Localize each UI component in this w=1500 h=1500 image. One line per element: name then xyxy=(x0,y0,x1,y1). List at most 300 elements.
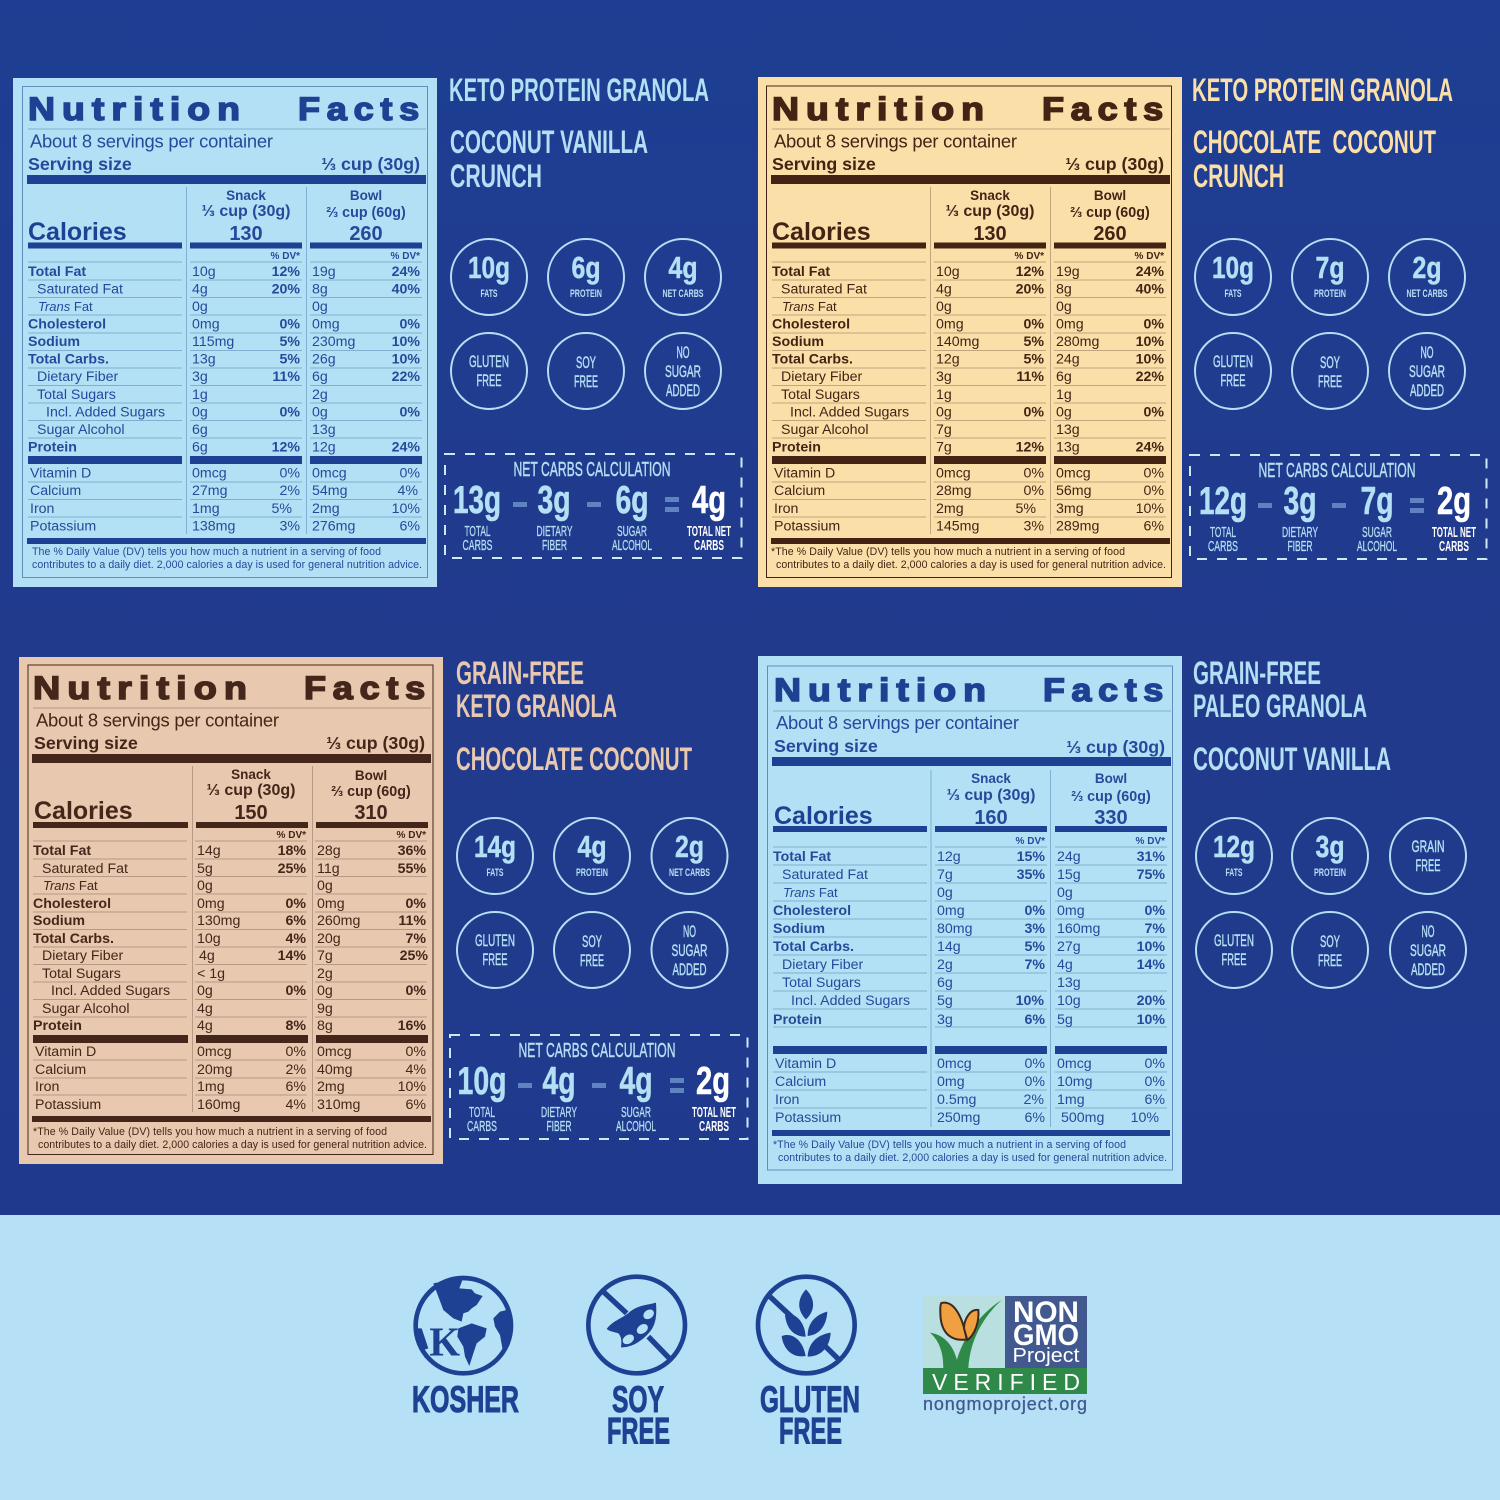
net carbs calculation: coconut vanilla crunch: CARBS xyxy=(462,538,492,554)
nutrient rows: 0mcg xyxy=(1057,1056,1092,1072)
text: servings per container: About 8 servings per container xyxy=(36,710,279,730)
product name: grain-free keto granola chocolate coconut: GRAIN-FREE xyxy=(456,655,584,691)
footnote xyxy=(33,1126,427,1151)
icon: grass blades and butterfly xyxy=(930,1300,1002,1368)
nutrient rows: 5% xyxy=(1015,501,1036,517)
product name: keto protein granola chocolate coconut crunch: CRUNCH xyxy=(1193,158,1284,194)
badges: paleo coconut vanilla: SOY xyxy=(1320,933,1340,951)
thick rules xyxy=(772,757,1171,1136)
nutrient rows: 20mg xyxy=(197,1062,232,1078)
nutrient rows: 5% xyxy=(271,501,292,517)
heading: Nutrition Facts: Nutrition xyxy=(33,670,254,706)
nutrient rows: Total Sugars xyxy=(42,966,121,982)
nutrient rows: 0% xyxy=(405,983,426,999)
text: serving size: Serving size xyxy=(34,733,138,753)
nutrient rows: 1mg xyxy=(1057,1092,1085,1108)
calories header: % DV* xyxy=(397,830,426,841)
text: serving size xyxy=(34,733,425,753)
nutrient rows: 11% xyxy=(272,369,300,385)
nutrient rows: 10g xyxy=(192,264,216,280)
nutrient rows: 289mg xyxy=(1056,518,1099,534)
logo: Non GMO Project Verified: GMO xyxy=(1013,1319,1079,1352)
badges: grain-free keto chocolate coconut xyxy=(457,818,728,988)
text: serving size: ⅓ cup (30g) xyxy=(1066,737,1165,757)
nutrient rows: 1mg xyxy=(197,1079,225,1095)
nutrient rows: 16% xyxy=(398,1018,426,1034)
badges: chocolate coconut crunch: NO xyxy=(1420,344,1434,362)
badges: coconut vanilla crunch: FREE xyxy=(476,372,502,390)
badges: coconut vanilla crunch xyxy=(451,239,721,409)
text: serving size: Serving size xyxy=(772,154,876,174)
nutrient rows: 10% xyxy=(392,501,420,517)
nutrient rows: 10g xyxy=(1057,993,1081,1009)
net carbs calculation: grain-free keto chocolate coconut: TOTAL NET xyxy=(692,1105,736,1121)
certification: kosher xyxy=(412,1277,519,1420)
badges: chocolate coconut crunch: FATS xyxy=(1224,288,1242,300)
calories header: Calories xyxy=(772,218,871,246)
nutrient rows: Total Fat xyxy=(772,264,830,280)
nutrient rows: 1mg xyxy=(192,501,220,517)
nutrient rows: 6g xyxy=(192,422,208,438)
net carbs calculation: coconut vanilla crunch: NET CARBS CALCULATION xyxy=(514,459,670,481)
heading: Nutrition Facts: Nutrition xyxy=(772,91,991,127)
nutrient rows: Total Fat xyxy=(28,264,86,280)
net carbs calculation: coconut vanilla crunch: ALCOHOL xyxy=(612,538,652,554)
nutrient rows: 6% xyxy=(1143,518,1164,534)
nutrient rows: 0mcg xyxy=(192,466,227,482)
nutrient rows: Total Fat xyxy=(773,849,831,865)
badges: coconut vanilla crunch: NO xyxy=(676,344,690,362)
nutrient rows: 0% xyxy=(399,404,420,420)
nutrient rows: Iron xyxy=(774,501,798,517)
nutrient rows: 10% xyxy=(1137,1012,1165,1028)
nutrient rows: 0mcg xyxy=(937,1056,972,1072)
nutrient rows: 2g xyxy=(937,957,953,973)
net carbs calculation: grain-free keto chocolate coconut: NET CARBS CALCULATION xyxy=(518,1040,676,1062)
nutrient rows: 0g xyxy=(1056,404,1072,420)
certification: gluten free xyxy=(758,1277,860,1452)
nutrient rows: 36% xyxy=(398,843,426,859)
nutrient rows xyxy=(28,264,420,534)
net carbs calculation: chocolate coconut crunch: ALCOHOL xyxy=(1357,539,1397,555)
nutrient rows: Dietary Fiber xyxy=(42,948,123,964)
net carbs calculation: coconut vanilla crunch xyxy=(445,454,742,558)
nutrient rows: Dietary Fiber xyxy=(37,369,118,385)
nutrient rows: 0% xyxy=(285,896,306,912)
heading: Nutrition Facts xyxy=(33,670,432,706)
nutrient rows: 56mg xyxy=(1056,483,1092,499)
nutrient rows: 1g xyxy=(1056,387,1072,403)
nutrient rows: 7g xyxy=(936,440,952,456)
net carbs calculation: chocolate coconut crunch: 7g xyxy=(1360,480,1394,523)
calories header: % DV* xyxy=(277,830,306,841)
label: gluten free: GLUTEN xyxy=(760,1379,860,1420)
nutrient rows: 160mg xyxy=(1057,921,1100,937)
nutrient rows: 7g xyxy=(937,867,953,883)
calories header: Bowl xyxy=(355,768,387,783)
nutrient rows: 4% xyxy=(285,1097,306,1113)
calories header: % DV* xyxy=(1135,251,1164,262)
product name: keto protein granola coconut vanilla crunch: CRUNCH xyxy=(450,158,542,194)
net carbs calculation: chocolate coconut crunch: TOTAL xyxy=(1210,525,1236,541)
footnote: contributes to a daily diet. 2,000 calories a day is used for general nutrition advice. xyxy=(776,559,1166,571)
nutrient rows: 7% xyxy=(1024,957,1045,973)
badges: coconut vanilla crunch: FREE xyxy=(574,373,598,391)
nutrient rows: 19g xyxy=(312,264,336,280)
nutrient rows: 0mg xyxy=(936,316,964,332)
calories header: 130 xyxy=(229,223,263,245)
nutrient rows: Sugar Alcohol xyxy=(42,1001,130,1017)
nutrient rows: 12g xyxy=(936,352,960,368)
badges: coconut vanilla crunch: ADDED xyxy=(666,382,700,400)
badges: grain-free keto chocolate coconut: NO xyxy=(683,923,696,941)
nutrient rows: Potassium xyxy=(30,518,96,534)
nutrient rows: 0mg xyxy=(937,1074,965,1090)
badges: paleo coconut vanilla: 3g xyxy=(1316,829,1344,864)
nutrient rows: 5% xyxy=(1023,334,1044,350)
text: serving size xyxy=(772,154,1164,174)
badges: paleo coconut vanilla: ADDED xyxy=(1411,961,1445,979)
nutrient rows: 0mg xyxy=(317,896,345,912)
nutrient rows: 2% xyxy=(285,1062,306,1078)
nutrient rows: 10mg xyxy=(1057,1074,1092,1090)
nutrient rows: 5g xyxy=(197,861,213,877)
badges: chocolate coconut crunch: SUGAR xyxy=(1409,363,1445,381)
panel: nutrition label, chocolate coconut keto xyxy=(19,657,443,1164)
icon: kosher globe xyxy=(416,1277,512,1373)
nutrient rows: 0mcg xyxy=(936,466,971,482)
nutrient rows: 0% xyxy=(1143,483,1164,499)
nutrient rows: 2mg xyxy=(317,1079,345,1095)
net carbs calculation: chocolate coconut crunch: DIETARY xyxy=(1282,525,1318,541)
footnote xyxy=(771,546,1166,571)
net carbs calculation: grain-free keto chocolate coconut: ALCOHOL xyxy=(616,1119,656,1135)
nutrient rows: 0mcg xyxy=(317,1044,352,1060)
nutrient rows: 24% xyxy=(392,264,420,280)
logo: Non GMO Project Verified: NON xyxy=(1013,1296,1079,1329)
badges: chocolate coconut crunch: 10g xyxy=(1212,250,1254,285)
nutrient rows: 11g xyxy=(317,861,340,877)
nutrient rows: Incl. Added Sugars xyxy=(791,993,910,1009)
nutrient rows: 6g xyxy=(192,440,208,456)
net carbs calculation: grain-free keto chocolate coconut: DIETARY xyxy=(541,1105,577,1121)
nutrient rows: 8g xyxy=(317,1018,333,1034)
net carbs calculation: grain-free keto chocolate coconut: FIBER xyxy=(546,1119,572,1135)
nutrient rows: 10% xyxy=(1136,334,1164,350)
nutrient rows: 55% xyxy=(398,861,426,877)
product name: grain-free paleo granola coconut vanilla: PALEO GRANOLA xyxy=(1193,688,1367,724)
footnote xyxy=(773,1139,1167,1164)
badges: chocolate coconut crunch: FREE xyxy=(1220,372,1246,390)
badges: paleo coconut vanilla: 12g xyxy=(1213,829,1255,864)
badges: chocolate coconut crunch: ADDED xyxy=(1410,382,1444,400)
background: light blue footer band xyxy=(0,1215,1500,1500)
nutrient rows: Total Sugars xyxy=(782,975,861,991)
nutrient rows: 12% xyxy=(1016,440,1044,456)
footnote: *The % Daily Value (DV) tells you how much a nutrient in a serving of food xyxy=(771,546,1125,558)
badges: grain-free keto chocolate coconut: ADDED xyxy=(672,961,707,979)
nutrient rows: 115mg xyxy=(192,334,234,350)
certification: soy free xyxy=(588,1277,685,1452)
badges: grain-free keto chocolate coconut: 4g xyxy=(578,829,606,864)
calories header: 310 xyxy=(354,802,388,824)
calories header: Calories xyxy=(34,797,133,825)
nutrient rows: Saturated Fat xyxy=(42,861,128,877)
heading: Nutrition Facts: Facts xyxy=(298,91,426,127)
nutrient rows: Incl. Added Sugars xyxy=(46,404,165,420)
nutrient rows: 4g xyxy=(1057,957,1073,973)
nutrient rows: 12% xyxy=(1016,264,1044,280)
net carbs calculation: coconut vanilla crunch: 6g xyxy=(616,479,648,522)
nutrient rows: 0g xyxy=(937,885,953,901)
nutrient rows: 14% xyxy=(278,948,306,964)
nutrient rows: Iron xyxy=(35,1079,59,1095)
nutrient rows: 24g xyxy=(1057,849,1081,865)
net carbs calculation: coconut vanilla crunch: 3g xyxy=(538,479,570,522)
nutrient rows: 130mg xyxy=(197,913,240,929)
badges: paleo coconut vanilla: FREE xyxy=(1222,951,1246,969)
footnote: contributes to a daily diet. 2,000 calories a day is used for general nutrition advice. xyxy=(32,559,422,571)
calories header: % DV* xyxy=(391,251,420,262)
nutrient rows: 0% xyxy=(405,1044,426,1060)
nutrient rows: 4g xyxy=(192,282,208,298)
calories header: Calories xyxy=(774,802,873,830)
nutrient rows: 14g xyxy=(937,939,961,955)
nutrient rows: Vitamin D xyxy=(30,466,91,482)
nutrient rows: Protein xyxy=(773,1012,822,1028)
product name: keto protein granola coconut vanilla crunch: COCONUT VANILLA xyxy=(450,124,648,160)
badges: coconut vanilla crunch: NET CARBS xyxy=(662,288,704,300)
nutrient rows: 0% xyxy=(1144,903,1165,919)
nutrient rows: 10% xyxy=(398,1079,426,1095)
nutrient rows xyxy=(772,264,1164,534)
nutrient rows: 14% xyxy=(1137,957,1165,973)
net carbs calculation: chocolate coconut crunch: 2g xyxy=(1437,480,1471,523)
label: gluten free xyxy=(760,1379,860,1452)
heading: Nutrition Facts xyxy=(774,672,1170,708)
nutrient rows: 7g xyxy=(317,948,333,964)
nutrient rows: 10% xyxy=(1136,501,1164,517)
footnote: contributes to a daily diet. 2,000 calories a day is used for general nutrition advice. xyxy=(38,1139,427,1151)
net carbs calculation: chocolate coconut crunch: FIBER xyxy=(1288,539,1312,555)
nutrient rows: Potassium xyxy=(774,518,840,534)
badges: coconut vanilla crunch: PROTEIN xyxy=(570,288,602,300)
nutrient rows: 4g xyxy=(197,1001,213,1017)
nutrient rows: 40% xyxy=(392,282,420,298)
nutrient rows: Trans Fat xyxy=(43,878,98,893)
nutrient rows: 10g xyxy=(197,931,221,947)
nutrient rows: Sugar Alcohol xyxy=(781,422,869,438)
nutrient rows: 5g xyxy=(1057,1012,1073,1028)
nutrient rows: 10% xyxy=(1136,352,1164,368)
nutrient rows: 3g xyxy=(936,369,952,385)
badges: coconut vanilla crunch: SUGAR xyxy=(665,363,701,381)
nutrient rows: Sodium xyxy=(33,913,85,929)
nutrient rows: 0% xyxy=(285,1044,306,1060)
nutrient rows: Protein xyxy=(772,440,821,456)
nutrient rows: 140mg xyxy=(936,334,979,350)
badges: grain-free keto chocolate coconut: 2g xyxy=(675,829,704,864)
heading: Nutrition Facts xyxy=(28,91,426,127)
nutrient rows: Saturated Fat xyxy=(37,282,123,298)
nutrient rows: 8% xyxy=(285,1018,306,1034)
nutrient rows: 6% xyxy=(285,913,306,929)
nutrient rows: 0mcg xyxy=(197,1044,232,1060)
nutrient rows: 8g xyxy=(1056,282,1072,298)
nutrient rows: Vitamin D xyxy=(775,1056,836,1072)
nutrient rows: 2g xyxy=(312,387,328,403)
nutrient rows: 6g xyxy=(312,369,328,385)
footnote: The % Daily Value (DV) tells you how much a nutrient in a serving of food xyxy=(32,546,381,558)
nutrient rows: 4% xyxy=(405,1062,426,1078)
nutrient rows: 0% xyxy=(279,316,300,332)
logo: Non GMO Project Verified: Project xyxy=(1012,1345,1080,1367)
nutrient rows: 0g xyxy=(317,983,333,999)
nutrient rows: 20% xyxy=(272,282,300,298)
badges: paleo coconut vanilla: SUGAR xyxy=(1410,942,1446,960)
label: soy free: SOY xyxy=(612,1379,664,1420)
heading: Nutrition Facts: Facts xyxy=(1042,91,1170,127)
nutrient rows: 12g xyxy=(937,849,961,865)
calories header: % DV* xyxy=(1015,251,1044,262)
nutrient rows: Trans Fat xyxy=(38,299,93,314)
nutrient rows: 6% xyxy=(285,1079,306,1095)
nutrient rows: 0% xyxy=(1144,1056,1165,1072)
nutrient rows: 7% xyxy=(405,931,426,947)
calories header: ⅔ cup (60g) xyxy=(1071,789,1151,805)
logo: Non GMO Project Verified: VERIFIED xyxy=(932,1369,1080,1395)
nutrient rows: 13g xyxy=(1057,975,1081,991)
footnote: contributes to a daily diet. 2,000 calories a day is used for general nutrition advice. xyxy=(778,1152,1167,1164)
nutrient rows: Sodium xyxy=(28,334,80,350)
badges: paleo coconut vanilla xyxy=(1196,818,1466,988)
nutrient rows: 0g xyxy=(312,299,328,315)
nutrient rows: 25% xyxy=(278,861,306,877)
nutrient rows: Total Sugars xyxy=(37,387,116,403)
nutrient rows: 280mg xyxy=(1056,334,1099,350)
nutrient rows: 12% xyxy=(272,264,300,280)
nutrient rows: 28mg xyxy=(936,483,972,499)
calories header xyxy=(772,188,1164,262)
nutrient rows: 0g xyxy=(317,878,333,894)
product name: grain-free paleo granola coconut vanilla xyxy=(1193,655,1391,777)
label: soy free: FREE xyxy=(607,1410,670,1452)
nutrient rows: Incl. Added Sugars xyxy=(51,983,170,999)
nutrient rows: 13g xyxy=(192,352,216,368)
product name: keto protein granola coconut vanilla crunch: KETO PROTEIN GRANOLA xyxy=(449,72,709,108)
nutrient rows: 0mg xyxy=(312,316,340,332)
badges: coconut vanilla crunch: SOY xyxy=(576,354,596,372)
net carbs calculation: coconut vanilla crunch: 4g xyxy=(692,479,726,522)
net carbs calculation: coconut vanilla crunch: TOTAL NET xyxy=(687,524,731,540)
net carbs calculation: grain-free keto chocolate coconut: 10g xyxy=(458,1060,506,1103)
nutrient rows: 0% xyxy=(1023,466,1044,482)
nutrient rows: 3g xyxy=(192,369,208,385)
nutrient rows: 20g xyxy=(317,931,341,947)
nutrient rows: 25% xyxy=(400,948,428,964)
nutrient rows: 2mg xyxy=(936,501,964,517)
calories header: 260 xyxy=(1093,223,1127,245)
nutrient rows: 40mg xyxy=(317,1062,352,1078)
calories header: 150 xyxy=(234,802,268,824)
text: servings per container: About 8 servings per container xyxy=(776,712,1019,733)
nutrient rows: 6% xyxy=(1024,1012,1045,1028)
icon: crossed-out wheat xyxy=(758,1277,855,1373)
nutrient rows: 0g xyxy=(192,404,208,420)
nutrient rows: 31% xyxy=(1137,849,1165,865)
calories header: Bowl xyxy=(1095,771,1127,786)
nutrient rows: 6% xyxy=(405,1097,426,1113)
nutrient rows: 4g xyxy=(197,1018,213,1034)
nutrient rows: Trans Fat xyxy=(783,885,838,900)
net carbs calculation: grain-free keto chocolate coconut: SUGAR xyxy=(621,1105,651,1121)
heading: Nutrition Facts: Nutrition xyxy=(28,91,247,127)
calories header: ⅓ cup (30g) xyxy=(946,203,1034,220)
nutrient rows: 27g xyxy=(1057,939,1081,955)
nutrient rows: 10% xyxy=(392,352,420,368)
nutrient rows: 13g xyxy=(1056,422,1080,438)
nutrient rows: 14g xyxy=(197,843,221,859)
nutrient rows: 0.5mg xyxy=(937,1092,976,1108)
nutrient rows: 1g xyxy=(936,387,952,403)
icon: crossed-out soybean pod xyxy=(588,1277,685,1373)
text: serving size: Serving size xyxy=(774,736,878,756)
net carbs calculation: grain-free keto chocolate coconut: 4g xyxy=(542,1060,576,1103)
nutrient rows: Protein xyxy=(33,1018,82,1034)
product name: keto protein granola coconut vanilla crunch xyxy=(449,72,709,194)
nutrient rows: Calcium xyxy=(774,483,825,499)
nutrient rows: Total Carbs. xyxy=(772,352,853,368)
badges: coconut vanilla crunch: 6g xyxy=(572,250,600,285)
logo: Non GMO Project Verified: nongmoproject.org xyxy=(923,1394,1087,1414)
nutrient rows: 500mg xyxy=(1061,1110,1104,1126)
nutrient rows: 0% xyxy=(1143,404,1164,420)
nutrient rows: 6% xyxy=(399,518,420,534)
nutrient rows: 0% xyxy=(399,466,420,482)
nutrient rows: 230mg xyxy=(312,334,355,350)
label: kosher: KOSHER xyxy=(412,1379,519,1420)
nutrient rows: Protein xyxy=(28,440,77,456)
nutrient rows: 0mcg xyxy=(1056,466,1091,482)
nutrient rows: 0mg xyxy=(1056,316,1084,332)
nutrient rows: 10g xyxy=(936,264,960,280)
net carbs calculation: chocolate coconut crunch: 12g xyxy=(1199,480,1247,523)
calories header: 260 xyxy=(349,223,383,245)
nutrient rows: Sodium xyxy=(772,334,824,350)
product name: grain-free keto granola chocolate coconut: KETO GRANOLA xyxy=(456,688,617,724)
net carbs calculation: coconut vanilla crunch: SUGAR xyxy=(617,524,647,540)
badges: grain-free keto chocolate coconut: NET CARBS xyxy=(669,867,710,879)
badges: coconut vanilla crunch: 4g xyxy=(668,250,698,285)
nutrient rows: 0% xyxy=(1144,1074,1165,1090)
nutrient rows: Potassium xyxy=(35,1097,101,1113)
badges: grain-free keto chocolate coconut: PROTEIN xyxy=(576,867,608,879)
text: serving size xyxy=(28,154,420,174)
nutrient rows: 4g xyxy=(199,948,215,964)
nutrient rows: 145mg xyxy=(936,518,979,534)
panel: nutrition label, coconut vanilla crunch xyxy=(13,78,437,587)
nutrient rows: 3% xyxy=(1023,518,1044,534)
net carbs calculation: grain-free keto chocolate coconut: CARBS xyxy=(699,1119,729,1135)
badges: chocolate coconut crunch: PROTEIN xyxy=(1314,288,1346,300)
text: servings per container: About 8 servings per container xyxy=(30,130,273,152)
badges: paleo coconut vanilla: NO xyxy=(1422,923,1435,941)
product name: grain-free paleo granola coconut vanilla: GRAIN-FREE xyxy=(1193,655,1321,691)
calories header: % DV* xyxy=(271,251,300,262)
badges: chocolate coconut crunch: SOY xyxy=(1320,354,1340,372)
badges: coconut vanilla crunch: GLUTEN xyxy=(469,353,509,371)
badges: grain-free keto chocolate coconut: FREE xyxy=(580,952,604,970)
